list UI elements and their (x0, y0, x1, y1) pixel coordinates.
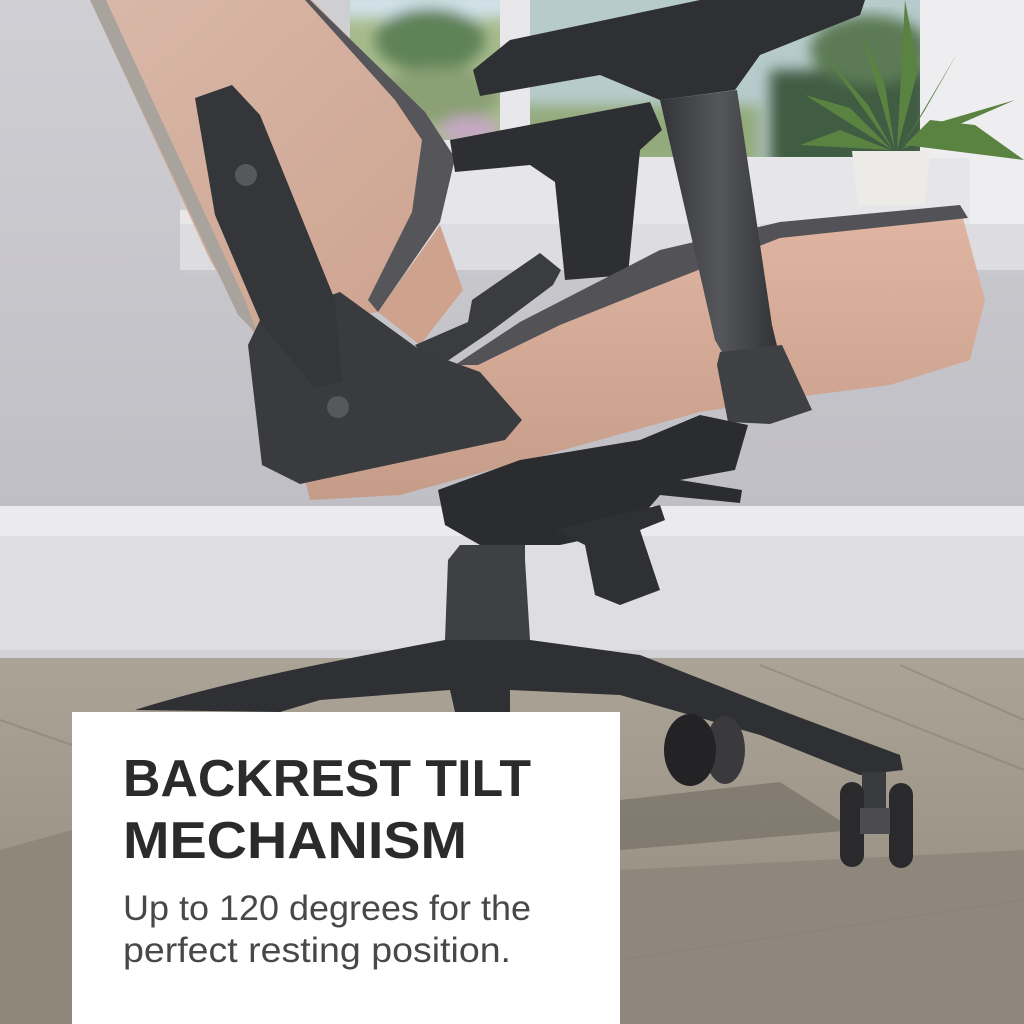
window (180, 0, 1024, 274)
description (123, 889, 531, 970)
casters (664, 714, 913, 868)
chair backrest (90, 0, 463, 345)
seat cushion (305, 205, 985, 500)
description: perfect resting position. (123, 931, 511, 970)
skirting board (0, 506, 1024, 666)
text card (72, 712, 620, 1024)
lever handle (415, 253, 561, 366)
tilt bracket (195, 85, 522, 484)
heading (123, 750, 531, 870)
description: Up to 120 degrees for the (123, 889, 531, 928)
plant (800, 0, 1024, 205)
wall (0, 0, 1024, 520)
heading: MECHANISM (123, 812, 467, 870)
armrest: front (473, 0, 865, 424)
gas lift and mechanism (438, 415, 748, 640)
star base (135, 640, 903, 775)
heading: BACKREST TILT (123, 750, 531, 808)
floor (0, 658, 1024, 1024)
armrest: rear (450, 102, 662, 280)
